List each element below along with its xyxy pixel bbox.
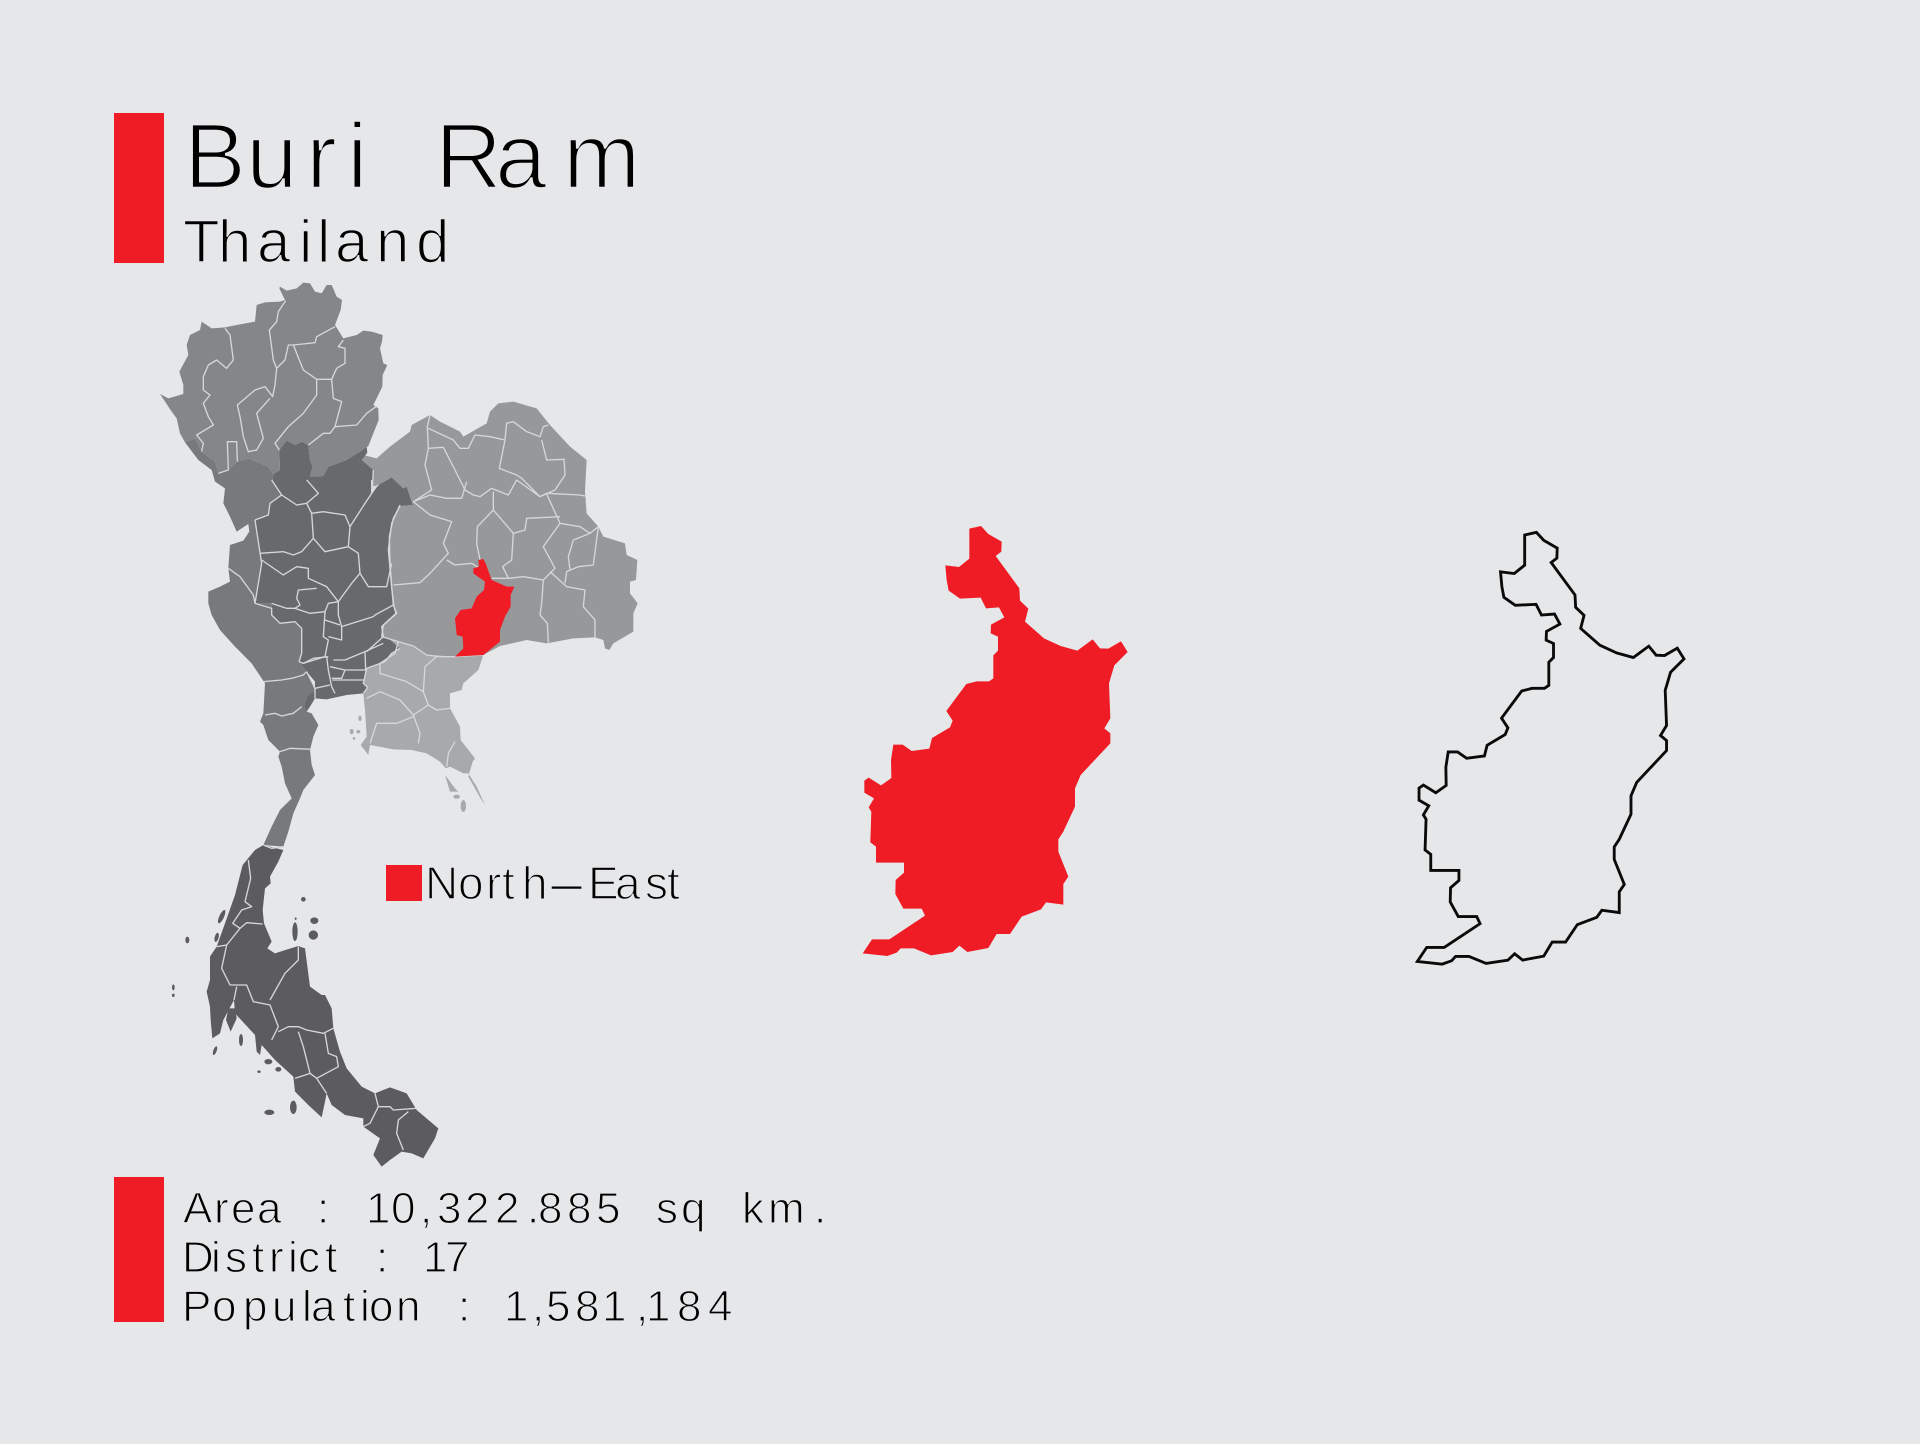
stat: district: District : 17 bbox=[182, 1233, 469, 1282]
province borders bbox=[197, 301, 598, 1150]
region: West bbox=[185, 438, 318, 847]
region: South bbox=[172, 845, 438, 1167]
region: North-East bbox=[362, 402, 638, 657]
borders: Central bbox=[255, 480, 400, 698]
stat: area: Area : 10,322.885 sq km. bbox=[183, 1184, 826, 1233]
borders: South bbox=[217, 860, 417, 1150]
legend label: North-East: – bbox=[551, 851, 583, 914]
borders: North bbox=[197, 301, 376, 473]
borders: West bbox=[228, 568, 312, 848]
highlighted province on map: Buri Ram bbox=[455, 559, 514, 657]
stats text block bbox=[182, 1184, 826, 1331]
legend swatch bbox=[386, 865, 422, 901]
stats accent bar bbox=[114, 1177, 164, 1322]
title: Buri Ram: Buri Ram bbox=[184, 104, 640, 208]
subtitle: Thailand: Thailand bbox=[183, 208, 449, 275]
borders: North-East bbox=[372, 415, 598, 643]
title accent bar bbox=[114, 113, 164, 263]
map: Thailand regions bbox=[160, 283, 638, 1167]
legend label: North-East: North bbox=[425, 857, 548, 909]
enlarged province: red silhouette bbox=[863, 526, 1128, 956]
legend label: North-East: East bbox=[588, 857, 680, 909]
region: Central bbox=[255, 441, 413, 712]
enlarged province: black outline bbox=[1417, 532, 1684, 964]
borders: East bbox=[363, 637, 483, 767]
region: East bbox=[350, 636, 485, 812]
region: North bbox=[160, 283, 387, 477]
stat: population: Population : 1,581,184 bbox=[182, 1282, 732, 1331]
